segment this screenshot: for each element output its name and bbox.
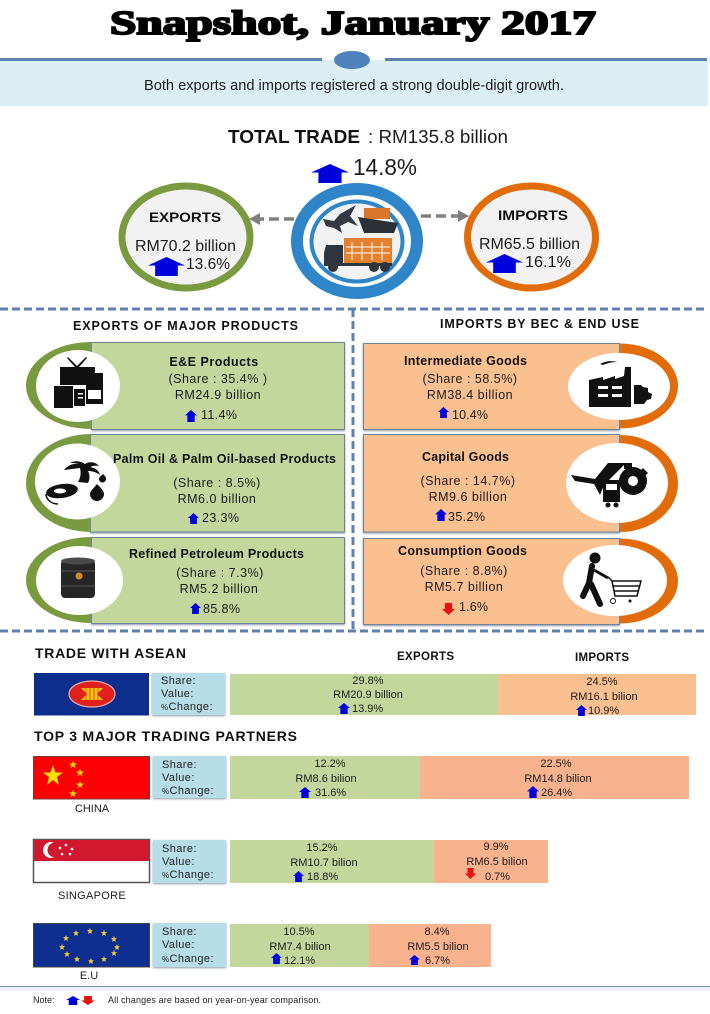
flag: ASEAN [34, 673, 149, 716]
panel: consumption goods [364, 538, 678, 624]
subtitle banner: Both exports and imports registered a strong double-digit growth. [144, 77, 564, 94]
panel: refined petroleum: RM5.2 billion [180, 582, 258, 596]
row: EU: Share: [162, 926, 197, 938]
row: ASEAN: 13.9% [352, 703, 383, 715]
panel: palm oil: RM6.0 billion [178, 492, 256, 506]
row: EU: RM5.5 bilion [407, 941, 469, 953]
icon: shopper with cart [583, 552, 641, 604]
imports circle: 16.1% [525, 254, 571, 271]
heading: top 3 partners: TOP 3 MAJOR TRADING PARTNERS [34, 728, 297, 744]
arrow: to imports [421, 210, 469, 222]
panel: capital goods: (Share : 14.7%) [420, 474, 516, 488]
label: Singapore: SINGAPORE [58, 890, 126, 902]
row: Singapore: RM6.5 bilion [466, 856, 528, 868]
flag: EU [34, 924, 150, 967]
subtitle banner [0, 51, 708, 106]
column heading: exports: EXPORTS [397, 651, 454, 663]
row: China: 31.6% [315, 787, 346, 799]
row: China [153, 756, 689, 799]
panel: refined petroleum: (Share : 7.3%) [176, 566, 264, 580]
row: ASEAN: 29.8% [352, 675, 384, 687]
panel: consumption goods: RM5.7 billion [425, 580, 503, 594]
panel: E&E products: E&E Products [169, 355, 259, 369]
panel: refined petroleum: Refined Petroleum Products [129, 547, 304, 561]
footer note: Note: [33, 995, 55, 1005]
row: China: 26.4% [541, 787, 572, 799]
row: ASEAN: 24.5% [586, 676, 618, 688]
section dividers [0, 309, 708, 631]
icon: electronics [54, 357, 103, 408]
row: China: Share: [162, 759, 197, 771]
total trade change [311, 154, 417, 183]
heading: imports by BEC: IMPORTS BY BEC & END USE [440, 317, 639, 331]
panel: E&E products: 11.4% [201, 408, 237, 422]
row: China: RM8.6 bilion [295, 773, 357, 785]
imports circle: RM65.5 billion [479, 236, 580, 253]
panel: palm oil: Palm Oil & Palm Oil-based Products [113, 452, 336, 466]
exports circle: 13.6% [186, 256, 230, 273]
panel: intermediate goods [364, 344, 678, 430]
column heading: imports: IMPORTS [575, 652, 629, 664]
row: Singapore: 15.2% [306, 842, 338, 854]
row: EU: 8.4% [424, 926, 450, 938]
flag: China [34, 756, 150, 799]
flag: Singapore [34, 840, 150, 882]
row: Singapore: %Change: [162, 869, 214, 881]
panel: consumption goods: (Share : 8.8%) [420, 564, 508, 578]
panel: intermediate goods: RM38.4 billion [427, 388, 513, 402]
icon: palm tree and oil [45, 461, 106, 504]
row: ASEAN: RM20.9 billion [333, 689, 403, 701]
panel: E&E products: (Share : 35.4% ) [168, 372, 268, 386]
row: China: RM14.8 bilion [524, 773, 592, 785]
row: EU: 6.7% [425, 955, 450, 967]
row: Singapore: 9.9% [483, 841, 509, 853]
heading: trade with ASEAN: TRADE WITH ASEAN [35, 645, 186, 661]
row: EU: 12.1% [284, 955, 315, 967]
imports circle [468, 186, 596, 288]
row: China: 12.2% [314, 758, 346, 770]
row: ASEAN [152, 673, 696, 717]
row: Singapore: 0.7% [485, 871, 510, 883]
panel: capital goods [364, 434, 678, 532]
icon: factory [589, 361, 652, 407]
total trade heading: TOTAL TRADE [228, 127, 360, 147]
row: Singapore [153, 840, 548, 883]
exports circle: RM70.2 billion [135, 238, 236, 255]
panel: capital goods: Capital Goods [422, 450, 509, 464]
row: EU: 10.5% [283, 926, 315, 938]
exports circle [122, 186, 250, 288]
row: China: Value: [162, 772, 195, 784]
row: Singapore: Share: [162, 843, 197, 855]
total trade change: 14.8% [353, 154, 417, 180]
row: Singapore: RM10.7 bilion [290, 857, 358, 869]
row: ASEAN: RM16.1 bilion [570, 691, 638, 703]
row: China: %Change: [162, 785, 214, 797]
title: Snapshot, January 2017 [110, 5, 596, 42]
row: EU: RM7.4 bilion [269, 941, 331, 953]
imports circle: IMPORTS [498, 207, 568, 223]
exports circle: EXPORTS [149, 209, 221, 225]
panel: intermediate goods: Intermediate Goods [404, 354, 527, 368]
label: China: CHINA [75, 803, 110, 815]
row: Singapore: 18.8% [307, 871, 338, 883]
icon: oil barrel [61, 558, 95, 598]
arrow: to exports [249, 213, 294, 225]
panel: refined petroleum [26, 537, 344, 624]
footer note: All changes are based on year-on-year comparison. [108, 995, 321, 1005]
row: EU: Value: [162, 939, 195, 951]
panel: refined petroleum: 85.8% [203, 602, 240, 616]
row: ASEAN: Value: [161, 688, 194, 700]
panel: consumption goods: 1.6% [459, 600, 488, 614]
heading: exports of major products: EXPORTS OF MAJOR PRODUCTS [73, 319, 298, 333]
row: EU [153, 923, 491, 967]
row: ASEAN: %Change: [161, 701, 213, 713]
panel: consumption goods: Consumption Goods [398, 544, 527, 558]
footer note [0, 986, 710, 1005]
panel: palm oil: 23.3% [202, 511, 239, 525]
total trade heading: : RM135.8 billion [368, 127, 508, 147]
label: EU: E.U [80, 970, 98, 982]
icon: plane, bus and gear [571, 463, 648, 508]
panel: intermediate goods: 10.4% [452, 408, 488, 422]
panel: capital goods: 35.2% [448, 510, 485, 524]
row: China: 22.5% [540, 758, 572, 770]
panel: capital goods: RM9.6 billion [429, 490, 507, 504]
panel: E&E products: RM24.9 billion [175, 388, 261, 402]
row: ASEAN: 10.9% [588, 705, 619, 717]
total trade heading [228, 127, 508, 147]
panel: palm oil: (Share : 8.5%) [173, 476, 261, 490]
row: ASEAN: Share: [161, 675, 196, 687]
panel: intermediate goods: (Share : 58.5%) [422, 372, 518, 386]
total trade circle with transport icon [297, 189, 417, 293]
panel: palm oil [26, 434, 344, 532]
panel: E&E products [26, 342, 344, 430]
row: EU: %Change: [162, 953, 214, 965]
row: Singapore: Value: [162, 856, 195, 868]
